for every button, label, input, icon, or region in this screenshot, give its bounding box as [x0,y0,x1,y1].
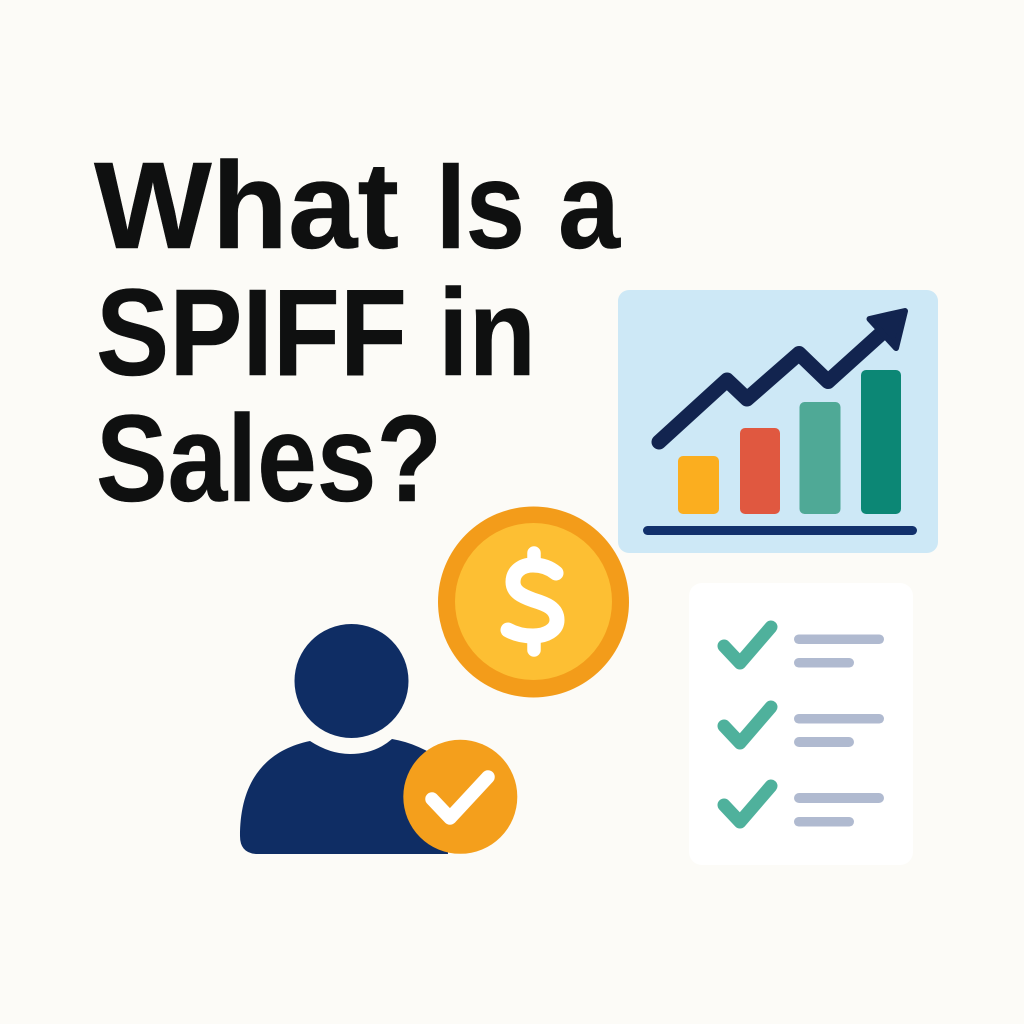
chart baseline [643,526,917,535]
title: SPIFF [96,265,407,402]
checklist row 1 [724,627,884,668]
bar: light green [800,402,840,514]
checklist row 2 [724,707,884,747]
title: Sales? [96,391,442,528]
person body [240,739,448,854]
bar: yellow [678,456,719,514]
title: a [558,138,621,275]
icon: dollar coin [438,506,629,698]
title [94,138,621,528]
title: Is [436,138,525,275]
check badge [403,740,517,854]
panel: growth chart [618,290,938,553]
bar: red [740,428,780,514]
dollar sign [508,553,557,650]
person head [294,624,408,738]
trend arrow [659,311,905,442]
panel: checklist [689,583,913,865]
bar: teal [861,370,901,514]
title: in [438,265,536,402]
title: What [94,138,399,275]
icon: person with check badge [240,624,517,854]
checklist row 3 [724,786,884,826]
